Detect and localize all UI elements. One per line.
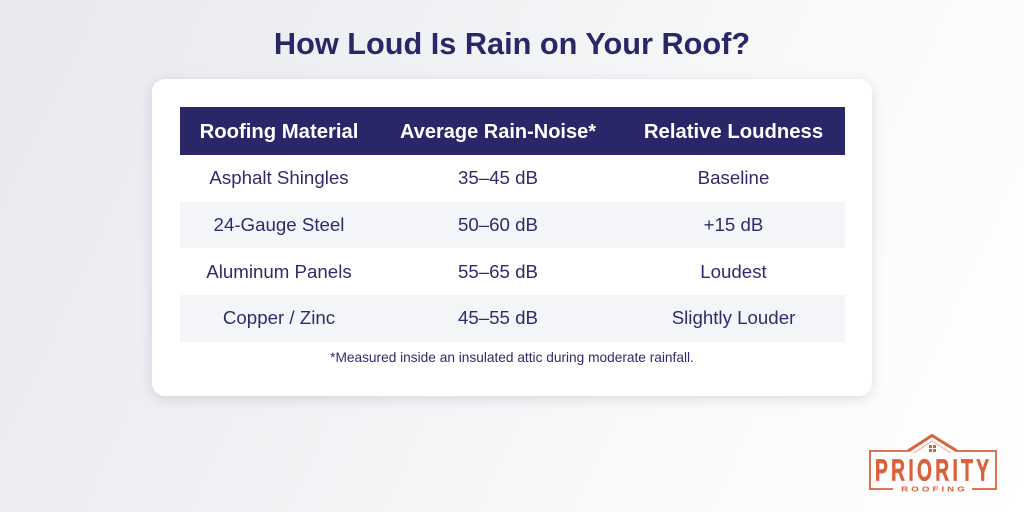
row: asphalt shingles: Asphalt Shingles [209, 167, 349, 188]
row: aluminum panels: Loudest [700, 260, 767, 282]
row: copper / zinc: 45–55 dB [458, 307, 538, 328]
row: 24-gauge steel: +15 dB [704, 214, 763, 235]
logo: Priority Roofing [869, 434, 997, 493]
panel: table card [152, 79, 872, 396]
table header row: Roofing Material [200, 120, 358, 142]
logo frame and roof [870, 436, 996, 489]
row: 24-gauge steel [180, 202, 844, 248]
row: asphalt shingles: Baseline [698, 167, 769, 188]
logo wordmark: PRIORITY [875, 454, 989, 488]
row: copper / zinc [180, 295, 844, 341]
table [180, 107, 845, 341]
row: asphalt shingles: 35–45 dB [458, 167, 538, 188]
table header row: Relative Loudness [644, 120, 823, 142]
row: aluminum panels [206, 260, 767, 282]
row: 24-gauge steel: 24-Gauge Steel [214, 214, 344, 235]
row: copper / zinc: Copper / Zinc [223, 307, 335, 328]
logo subtext: ROOFING [901, 485, 965, 493]
row: copper / zinc: Slightly Louder [672, 307, 795, 328]
title: How Loud Is Rain on Your Roof? [274, 26, 750, 61]
table header row: Average Rain-Noise* [400, 120, 596, 142]
footnote: *Measured inside an insulated attic during moderate rainfall. [330, 350, 694, 365]
logo window icon [929, 445, 936, 452]
table last row bottom edge fill [180, 341, 844, 342]
row: 24-gauge steel: 50–60 dB [458, 214, 538, 235]
table header row [180, 107, 844, 155]
row: asphalt shingles [209, 167, 769, 188]
row: aluminum panels: Aluminum Panels [206, 260, 352, 282]
row: aluminum panels: 55–65 dB [458, 260, 538, 282]
